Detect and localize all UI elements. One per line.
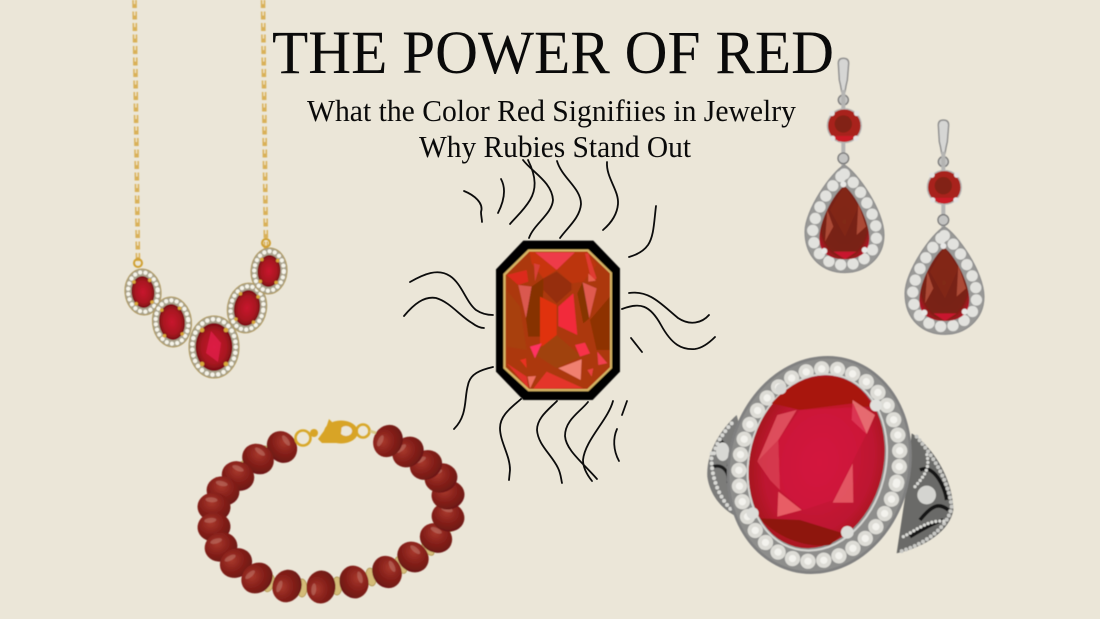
subtitle line 1: What the Color Red Signifiies in Jewelry	[307, 93, 796, 128]
right earring	[905, 120, 984, 334]
ruby facets	[506, 252, 610, 389]
diamond halo	[704, 336, 935, 594]
ring shank filigree	[707, 415, 953, 553]
left earring	[805, 58, 884, 273]
bracelet	[196, 419, 468, 606]
central ruby illustration	[496, 241, 620, 400]
black bezel	[496, 241, 620, 400]
necklace stones	[123, 247, 289, 378]
subtitle line 2: Why Rubies Stand Out	[419, 129, 691, 164]
radiating hand-drawn lines	[404, 160, 715, 483]
title: THE POWER OF RED	[272, 20, 834, 87]
cocktail ring	[704, 336, 953, 594]
bracelet spacers	[208, 438, 460, 597]
gold rim	[503, 249, 612, 391]
bracelet clasp	[296, 419, 376, 446]
ring ruby	[731, 360, 903, 563]
subtitle block	[307, 93, 796, 164]
bracelet beads	[196, 420, 468, 606]
necklace chains	[134, 0, 270, 267]
earrings	[805, 58, 984, 334]
necklace	[123, 0, 289, 378]
